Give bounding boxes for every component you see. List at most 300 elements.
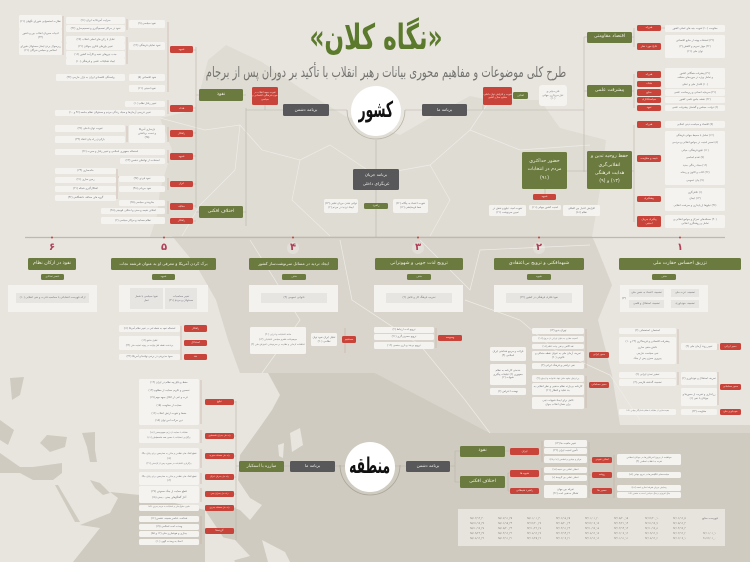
references columns: ۹۴/۰۶/۲۵_۲۶ xyxy=(527,537,541,540)
white row 10: اتحاد به وحدت الهی (۱۰) xyxy=(156,540,182,543)
red fight 5 xyxy=(205,491,234,497)
red 11 right: امنیتی xyxy=(646,220,652,224)
green: resistance economy xyxy=(587,32,632,43)
references columns: ۹۵/۰۹/۲۳_۳۷ xyxy=(470,532,484,535)
white r1: تغییر ماهیت ها (۱۴) xyxy=(555,442,576,445)
red 2-2: محور مسلمانی xyxy=(592,383,606,386)
red 3 xyxy=(438,335,462,341)
references columns: ۹۲/۱۲/۲۰_۱۰ xyxy=(645,517,659,520)
section number 5: ۵ xyxy=(161,242,167,253)
our programme box xyxy=(422,104,467,116)
white 2-3: نقد آگاهی و نفی بیات اعلام (۱۸) xyxy=(542,345,574,348)
mid 2-2: خدمتی کارنامه به نظام جمهوری (۶) تبلیغات پیگیری شبهات (۲) xyxy=(493,369,523,379)
solution label: راهکار xyxy=(178,131,185,135)
left row 5 xyxy=(66,51,125,58)
white 9 right: (۲۶) کتاب و کانون و رسانه xyxy=(680,171,710,174)
white r2: تأمین امنیت ایران (۲۲) xyxy=(553,449,578,452)
red 1-1 xyxy=(720,343,741,350)
white fight group 1 xyxy=(139,379,199,425)
white 10 right: (۱) تلاش‌گری xyxy=(688,191,702,194)
white 3-1: ترویج لذت ارتباط (۲) xyxy=(393,328,416,331)
red 'enemy' a: ایران xyxy=(522,449,527,453)
white 5-3 xyxy=(119,354,180,360)
red: method participation: شیوه xyxy=(542,194,547,198)
white 2-8 xyxy=(532,397,584,409)
white 7 right xyxy=(665,105,725,111)
red 11 right xyxy=(637,216,661,227)
green: discord region: اختلاف افکنی xyxy=(469,479,496,484)
red 4: مستقیم xyxy=(345,337,353,341)
red f: مصیر ها xyxy=(597,488,607,492)
white fight group 1: حفظ و یکپارچه نظام در ایران (۱۳) xyxy=(150,381,188,384)
white 10 right: (۱۳) ایمان xyxy=(689,197,701,200)
white fight group 3: برگزاری انتخابات در سوریه پس از آرامش (۲۱) xyxy=(147,462,191,465)
red c: راهبرد شیطانی xyxy=(516,488,533,492)
white 3-3: ترویج بی‌بند و باری جنسی (۱۲) xyxy=(387,344,421,347)
white 2-1 xyxy=(532,328,584,334)
white fight group 5: آغاز گفتگوهای یمنی - یمنی (۱۸) xyxy=(152,496,186,498)
section number 3: ۳ xyxy=(415,242,421,253)
green: revolutionary spirit: حفظ روحیه تدین و انقلابی‌گری xyxy=(591,154,628,168)
white 2 right: (۲۲) استفاده بهینه از منابع اقتصادی xyxy=(676,39,714,42)
references columns: ۹۴/۰۶/۱۸_۲۵ xyxy=(556,517,570,520)
white 5-3: سوء مدیریتی در برخی نهادها و آمریکا (۴۲) xyxy=(127,355,172,358)
red 2 right xyxy=(637,43,661,50)
white fight group 3: قطع کمک های نظامی و مالی به معارضین برای پایان جنگ (۱۹) xyxy=(142,452,196,460)
section inner 5 left: عمل xyxy=(144,298,149,302)
white 1-2 xyxy=(619,337,676,364)
political influence box: نفوذ سیاسی (۹) xyxy=(138,22,156,25)
section pill 2 xyxy=(527,274,551,280)
section header 5 xyxy=(111,258,216,270)
references columns: ۹۵/۱۱/۱۹_۳۹ xyxy=(470,522,484,525)
inner 1 c: تضعیف استقلال و قلمی xyxy=(633,301,660,305)
participation note left: تقویت امید، تبلیغ و نقش در تعیین سرنوشت (۲۱) xyxy=(493,207,522,214)
white s1: مواظبت از بیرون آمریکایی‌ها در جوانان اسلامی xyxy=(626,456,672,459)
strategy note left: ایجاد تردید در مردم (۲) xyxy=(328,206,354,209)
white s1: نفرت به انقلاب اسلامی (۳) xyxy=(636,460,662,462)
section pill 1 xyxy=(652,274,676,280)
internal current programme box: غربگرای داخلی xyxy=(363,180,389,186)
left row 2 xyxy=(66,25,125,32)
row economic: وابستگی اقتصادی ایران به بازار خارجی (۴۲) xyxy=(67,76,114,79)
green pill: our programme: اهداف xyxy=(517,94,524,97)
green: sowing discord xyxy=(199,206,243,218)
white 9 right xyxy=(665,131,725,185)
white fight group 1: حمایت از مقاومت (۱۵) xyxy=(156,404,182,407)
references columns: ۹۵/۰۳/۱۳_۴۰ xyxy=(470,517,484,520)
red 9 right xyxy=(637,155,661,162)
red 5 right xyxy=(637,89,661,96)
white 4-1: اختلافات آرمانی و نظارت بر سرنوشتی، آموزش ملی (۲) xyxy=(251,343,305,346)
references columns: ۹۵/۰۸/۱۲_۳۶ xyxy=(470,537,484,540)
references columns: ۹۳/۰۶/۱۶_۱۶ xyxy=(585,537,599,540)
tool label: ابزار xyxy=(179,181,184,185)
references columns: ۹۲/۱۱/۱۹_۹ xyxy=(645,522,658,525)
red 5-1 xyxy=(184,325,207,332)
mid 1-3 xyxy=(681,388,717,406)
enemy programme red note xyxy=(252,87,278,105)
references columns: ۹۵/۰۳/۱۱_۳۱ xyxy=(498,537,512,540)
white 1-1: استعمار، استضعاف (۲) xyxy=(635,329,660,332)
white 8 right: (۹) اقتصاد و سیاست دینی انقلابی xyxy=(677,123,713,126)
references columns: ۹۵/۰۴/۱۶_۳۲ xyxy=(498,532,512,535)
green: fight arrogance: مبارزه با استکبار xyxy=(247,464,276,469)
white 5-2 xyxy=(119,336,180,350)
white 1-2: پیشرفت اقتصادی و فن‌سالاری (۲۳ و ۱۰) xyxy=(625,340,670,343)
our programme box: region xyxy=(290,461,335,472)
participation note right xyxy=(563,205,600,216)
red 2-2 xyxy=(589,382,609,388)
red 8 right: هم‌راه xyxy=(646,122,652,126)
white 9 right: (۸) تعمیر امنیت در جوامع انقلابی و مردمی xyxy=(672,141,718,144)
section inner 3 xyxy=(386,293,452,303)
section header 6 xyxy=(28,258,76,270)
white 2-8: برای همان انقلاب جوان xyxy=(545,403,571,406)
references columns: ۹۳/۰۲/۰۹_۱۲ xyxy=(614,532,628,535)
white fight row 6: تامین حقوق ملی و انتخابات به مردم بحرین (۲۹) xyxy=(148,506,190,508)
strategy note right: تقویت اعتماد به بیگانه (۶۲) xyxy=(396,202,425,205)
references columns: ۹۴/۰۲/۰۹_۲۱ xyxy=(556,537,570,540)
method row 1 xyxy=(55,149,165,155)
hub circle: country xyxy=(351,86,401,136)
section pill 4: هدف xyxy=(291,275,297,278)
red 5-2: استدلال xyxy=(191,340,200,344)
green: maximum participation: مردم در انتخابات xyxy=(528,167,561,172)
section pill 5 xyxy=(152,274,175,280)
green: maximum participation: حضور حداکثری xyxy=(529,159,560,164)
box security: نفوذ امنیتی (۲۱) xyxy=(138,87,156,90)
white 6 right: (۲۲) نقشه جامع علمی کشور xyxy=(679,98,711,101)
white 5-1: استحاله تعهد به نقطه امن در تغییر نظام آمریکا (۴۴) xyxy=(124,327,175,330)
strategy note right xyxy=(393,199,428,213)
goal row 2 xyxy=(55,110,165,116)
section header 5: برک کردن آمریکا و معرفی او به عنوان فرشته نجات xyxy=(119,261,208,266)
method row 1: استحاله جمهوری اسلامی و تغییر رفتار و سیرت (۲۶) xyxy=(82,150,138,153)
mid 1-1: تغییر روند آرمان ملی (۳) xyxy=(686,345,712,348)
white s1 xyxy=(617,454,681,465)
cultural influence box xyxy=(129,42,165,50)
green: scientific progress xyxy=(587,85,632,97)
red 2 right: نتایج مورد نظر xyxy=(641,44,657,48)
white s3 xyxy=(617,485,681,491)
red 3 right: هم‌راه xyxy=(646,72,652,76)
red 10 right xyxy=(637,196,661,202)
box economic: نفوذ اقتصادی (۵) xyxy=(138,76,156,79)
green: scientific progress: پیشرفت علمی xyxy=(595,88,624,93)
mid 2-1: قرائت و مرجع شناختی ایران اسلامی (۴) xyxy=(493,350,523,357)
left row 5: جذب نیروهای نخبه و کارآمد کشور (۱۶) xyxy=(74,53,117,56)
white 3 right xyxy=(665,68,725,83)
white fight group 1: حفظ و تقویت ارتش انقلاب (۱۶) xyxy=(152,412,186,415)
solution middle box: بازسازی آمریکا xyxy=(139,128,155,131)
red b: شیوه ها xyxy=(520,471,529,475)
references columns: ۹۴/۰۴/۱۱_۲۳ xyxy=(556,527,570,530)
red 7 right xyxy=(637,105,661,111)
green: influence region: نفوذ xyxy=(478,448,487,453)
white 1-3 xyxy=(619,372,676,378)
section pill 4 xyxy=(282,274,306,280)
enemy programme box xyxy=(283,104,329,116)
inner 1 d: تضعیف خودباوری xyxy=(675,301,695,305)
white fight group 1: دین حرکت امن توان (۱۵) xyxy=(155,419,183,422)
white 1-5 xyxy=(619,409,676,415)
red 5-1: راهکار xyxy=(192,326,199,330)
discord row 2 xyxy=(101,208,165,214)
white r4: اختلاف افکنی بین شیعه (۱۵) xyxy=(552,468,579,471)
references columns xyxy=(470,517,716,540)
red fight 4 xyxy=(205,474,234,480)
left row 6: ایجاد تشکیلات علمی و فرهنگی (۱۰) xyxy=(76,60,115,63)
discord row 1 xyxy=(119,200,165,206)
white 1 right: مقاومت (۱۰) تقویت بنیه های اصلی کشور xyxy=(672,27,718,30)
red 9 right: نتیجه و مقاومت xyxy=(640,156,658,160)
method label 2 xyxy=(170,153,193,160)
white 2-4: تعریف آرمان ملی به عنوان نقطه متعالی و قانونی (۲۰) xyxy=(535,352,581,359)
green: sowing discord: اختلاف افکنی xyxy=(208,209,234,214)
hub arc: country xyxy=(346,110,406,140)
white 4-1: موضوعات قلمرو سیاسی انتخاباتی (۱۳) xyxy=(259,338,297,341)
white 6 right xyxy=(665,97,725,103)
tool row 4 xyxy=(55,195,116,201)
white 2-2 xyxy=(532,336,584,342)
red 1-2: محور مسلمانی xyxy=(723,385,738,388)
goal label: هدف xyxy=(179,106,184,110)
red 4 right: هدف xyxy=(646,81,652,85)
red 5 right: منابع xyxy=(646,90,652,94)
white 3-1 xyxy=(374,327,434,333)
section header 2: شبهه‌افکنی و ترویج بی‌اعتقادی xyxy=(509,261,569,266)
solution row 2 xyxy=(55,136,125,143)
red d: اهداف نفوذی xyxy=(595,458,609,461)
mid 1-2 xyxy=(681,372,717,385)
red fight 1: تبلیغ xyxy=(217,399,222,403)
green: maximum participation xyxy=(522,152,567,189)
inner 1 d xyxy=(671,300,699,308)
section number 1: ۱ xyxy=(677,242,683,253)
white s4 xyxy=(617,492,681,498)
white row 10 xyxy=(139,539,199,545)
solution row 2: بازکردن راه بیان انتقاد (۴۳) xyxy=(75,138,105,141)
white 5-1 xyxy=(119,325,180,332)
red fight 7: گزینه‌ها xyxy=(216,528,224,532)
white 1-2: پیروزی مجزی پس از جنگ xyxy=(633,357,662,360)
section inner 4 xyxy=(261,293,327,303)
section panel 3 xyxy=(374,285,463,312)
references columns: ۹۲/۰۶/۱۶_۵ xyxy=(673,517,686,520)
white 4-1: مانند انتخابات و انرژی (۲۰) xyxy=(265,333,291,336)
red fight 6 xyxy=(205,505,234,511)
discord label xyxy=(170,203,193,210)
references columns: ۹۳/۰۳/۱۴_۱۳ xyxy=(614,527,628,530)
red 5-2 xyxy=(184,340,207,346)
cultural influence box: نفوذ تمایلی فرهنگی (۲۲) xyxy=(134,44,160,47)
references columns: ۹۳/۰۱/۱۱_۱۱ xyxy=(614,537,628,540)
red 5-3 xyxy=(184,354,207,360)
white 3 right: و تعامل ویژه در حوزه‌های مختلف xyxy=(677,76,713,78)
red 6 right xyxy=(637,97,661,103)
section inner 5 right: مسئولان و مردم (۳۱) xyxy=(169,298,193,302)
inner 1 b: تضعیف عزت ملی xyxy=(675,290,695,294)
white s3: پیدایش جریان تفرقه اندازی است (۲۲) xyxy=(632,486,666,489)
section header 3 xyxy=(375,258,463,270)
tool box 2: نفوذ جریانی (۴۸) xyxy=(133,187,151,190)
note: country strength: قدرت‌یابی و عبارت‌پردازی جهانی (۱۰) xyxy=(542,90,564,100)
white 2-6: بی‌ارزش جلوه دادن نهاد خانواده و ازدواج (۲) xyxy=(537,377,579,380)
section pill 3: هدف xyxy=(416,275,422,278)
strategy note left xyxy=(324,199,358,213)
section inner 5 left: نفوذ سیاسی با شعار xyxy=(135,294,158,298)
white r5 xyxy=(544,475,587,481)
white fight group 3 xyxy=(139,448,199,469)
white row 9 xyxy=(139,531,199,537)
discord row 3 xyxy=(101,217,165,224)
red 3: وسوسه xyxy=(446,335,454,339)
red 2-1 xyxy=(589,352,609,358)
green: fight arrogance xyxy=(239,461,284,472)
white 2-8: تلاش برای ایجاد شبهات دینی xyxy=(543,399,573,402)
solution middle box: و دست برداشتن xyxy=(138,132,156,135)
references columns: ۹۲/۰۱/۰۱_۱ xyxy=(703,532,716,535)
section header 6: نفوذ در ارکان نظام xyxy=(33,261,71,266)
white fight group 2: مقابله با حمایت از رژیم صهیونیستی (۲۳) xyxy=(150,431,188,434)
references columns: ۹۳/۰۵/۲۰_۱۵ xyxy=(614,517,628,520)
white s4: جنگ افروزی و جنگ سیاسی است به مذهبی (۱۴) xyxy=(628,493,670,495)
red fight 7 xyxy=(205,528,234,534)
references columns: ۹۵/۰۷/۱۱_۳۵ xyxy=(498,517,512,520)
references columns: ۹۳/۱۲/۰۹_۱۹ xyxy=(585,522,599,525)
our programme red note xyxy=(483,87,512,105)
mid 1-2: تحریف استقلال و خودباوری (۲) xyxy=(682,377,716,380)
participation note right: نظام (۸۱) xyxy=(576,210,587,214)
references columns: ۹۱/۱۲/۰۱_۰ xyxy=(703,537,716,540)
white 3-2: ترویج مصرف‌گری (۲۱) xyxy=(392,335,416,338)
section pill 3 xyxy=(407,274,431,280)
references columns: ۹۲/۰۸/۱۲_۶ xyxy=(645,537,658,540)
references columns: ۹۳/۰۸/۱۲_۱۷ xyxy=(585,532,599,535)
method label xyxy=(170,46,193,53)
white fight group 1: عزت و غنی از اتکال جبهه مهم (۱۹) xyxy=(150,396,188,399)
section pill 6: عنصر تعدادی xyxy=(45,275,60,278)
box security xyxy=(129,85,165,92)
green: revolutionary spirit xyxy=(587,151,632,189)
solution row 1: تقویت توان داخلی (۳۶) xyxy=(77,127,103,130)
green: influence xyxy=(199,89,243,101)
left row 1: سرایت آمریکا به ایران (۲۱) xyxy=(81,19,110,22)
red 4 xyxy=(342,336,356,343)
mid 2-1 xyxy=(490,347,526,361)
participation note middle: امنیت کشور جهانی (۱۱) xyxy=(532,206,558,209)
white 2-4 xyxy=(532,351,584,361)
red 4 right xyxy=(637,81,661,87)
section header 1 xyxy=(619,258,741,270)
red fight 1 xyxy=(205,399,234,405)
discord solution label xyxy=(170,218,193,224)
mid 1-4: مقاومت (۲۳) xyxy=(692,410,706,413)
white row 8: وحدت امت اسلامی (۱۹) xyxy=(156,525,182,528)
references columns: ۹۴/۰۵/۲۰_۲۴ xyxy=(556,522,570,525)
white 8 right xyxy=(665,121,725,128)
inner 1 a: تضعیف اعتماد به نفس ملی xyxy=(631,290,662,294)
white 1-2: دانش منفی سازی xyxy=(638,346,657,349)
references columns: ۹۵/۰۶/۱۵_۳۴ xyxy=(498,522,512,525)
white fight group 5 xyxy=(139,486,199,503)
white s2: سیاست‌های انگلیسی‌ها در خروج جهانی (۲۹) xyxy=(629,473,669,476)
white 4-1 xyxy=(250,327,306,354)
green: discord region xyxy=(460,476,505,488)
white 9 right: (۹) بیان عمومی xyxy=(686,179,704,182)
white 2-7: کارنامه بی‌بازده نظام مذهبی و نظر انقلابی به بند تقلید و انتظار (۲۱) xyxy=(534,385,582,392)
white 1-4 xyxy=(619,379,676,386)
white 2-5 xyxy=(532,363,584,369)
references columns: ۹۲/۰۴/۱۹_۳ xyxy=(673,527,686,530)
section panel 6 xyxy=(8,285,97,312)
red fight 2: راه حل بحران فلسطین xyxy=(208,434,231,437)
our programme box: برنامه ما xyxy=(437,107,452,112)
strategy pill: راهبرد xyxy=(373,204,379,207)
references columns: ۹۴/۰۳/۱۴_۲۲ xyxy=(556,532,570,535)
inner 1 b xyxy=(671,289,699,297)
references columns: ۹۴/۱۰/۲۲_۲۸ xyxy=(527,527,541,530)
strategy pill xyxy=(364,203,388,209)
white 4 right xyxy=(665,81,725,88)
white 2-6 xyxy=(532,375,584,382)
white 2-3 xyxy=(532,344,584,349)
green: maximum participation: (۹۱) xyxy=(540,176,549,181)
red 1 right: هم‌راه xyxy=(646,25,652,29)
solution middle box xyxy=(129,125,165,143)
left row 3: تقابل با رکن های اصلی انقلاب (۲۷) xyxy=(76,38,115,41)
participation note left xyxy=(489,205,526,216)
section inner 5 left xyxy=(130,288,163,309)
tool row 4: گروه های مخالف دانشگاهی (۴۲) xyxy=(68,196,103,199)
white r1 xyxy=(544,440,587,447)
section number 6: ۶ xyxy=(49,242,55,253)
tool row 3 xyxy=(55,186,116,192)
tool row 1 xyxy=(55,168,116,174)
hub circle: country: کشور xyxy=(359,98,393,123)
section inner 6: ارائه فهرست انتخاباتی با محاسبه قدرت و نفی انقلابی (۱۰) xyxy=(20,295,85,299)
discord row 2: اختلاف شیعه و سنی و اختلاف قومیتی (۳۸) xyxy=(110,209,156,212)
white 11 right xyxy=(665,215,725,228)
references columns: ۹۵/۱۰/۱۹_۳۸ xyxy=(470,527,484,530)
green: influence: نفوذ xyxy=(217,92,225,97)
white 2-1: تهران بدیع (۱۳) xyxy=(550,329,566,332)
white row 8 xyxy=(139,524,199,530)
white fight group 1: تحسین و تکریم حمایت از مظلوم (۱۳) xyxy=(149,389,190,392)
white 2 right: توان ملی (۲۱) xyxy=(687,50,703,53)
section number 4: ۴ xyxy=(290,242,296,253)
box economic xyxy=(129,74,165,81)
red: method participation xyxy=(533,194,556,200)
strategy note left: دولتی شدن جریان تقلبی (۶۳) xyxy=(325,202,357,205)
left row 6 xyxy=(66,58,125,65)
section panel 4 xyxy=(249,285,338,312)
white 3-2 xyxy=(374,334,434,340)
section header 2 xyxy=(494,258,584,270)
red d xyxy=(592,457,612,463)
white 10 right: (۳۶) تبلیغ‌ها از پایداری و سرشت انقلابی xyxy=(674,204,716,207)
solution row 1 xyxy=(55,125,125,132)
section number 2: ۲ xyxy=(536,242,542,253)
white 1 right xyxy=(665,25,725,32)
references title: فهرست منابع xyxy=(702,516,718,520)
mid 1-4 xyxy=(681,409,717,415)
discord label: مقابله xyxy=(178,204,185,208)
left note 3 xyxy=(19,42,62,55)
tool row 3: اشکال‌گیری شبکه (۳۱) xyxy=(73,187,98,190)
references columns: ۹۵/۰۵/۲۰_۳۳ xyxy=(498,527,512,530)
